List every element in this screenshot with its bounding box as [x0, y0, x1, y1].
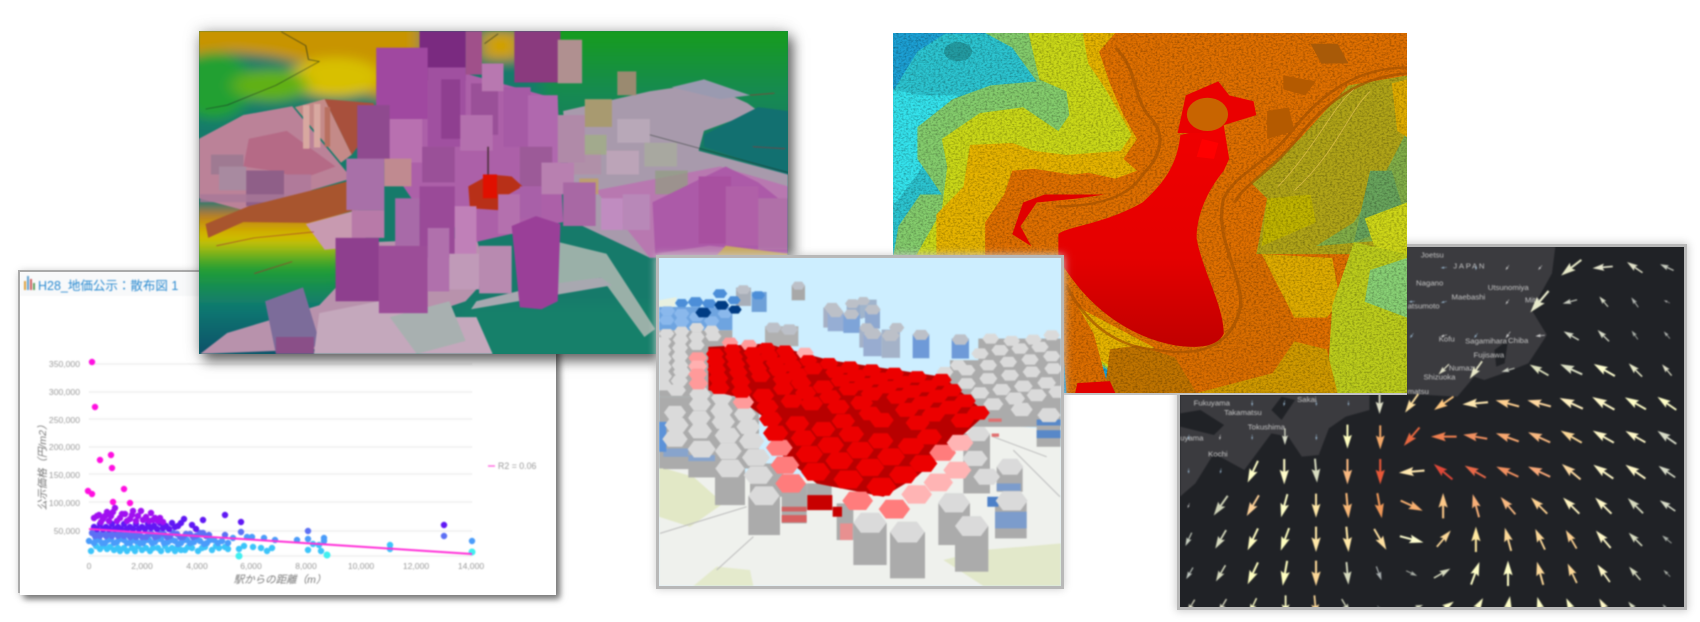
x axis title: 駅からの距離（m）: [234, 574, 326, 586]
place labels: Kofu: [1439, 334, 1455, 343]
panel: terrain hillshade elevation map: [893, 33, 1407, 393]
water clusters: [736, 282, 969, 359]
road lines on terrain: [206, 32, 788, 172]
place labels: uyama: [1180, 433, 1204, 442]
red high-elevation area: [1012, 81, 1256, 393]
coloured bands on stacks: [659, 419, 1061, 540]
x axis labels: 14,000: [458, 561, 484, 571]
scatter points: [88, 362, 472, 556]
place labels: Tokushima: [1248, 422, 1286, 431]
terrain colour layers: [162, 16, 839, 373]
panel: 3D city buildings on terrain: [199, 31, 788, 354]
dark red shadow under red hexagons: [708, 344, 987, 497]
place labels: Sakai: [1297, 395, 1317, 404]
place labels: Nagano: [1416, 278, 1443, 287]
left building mass: [199, 31, 788, 354]
small wind ticks over land: [1187, 265, 1543, 509]
x axis labels: [87, 561, 484, 571]
place labels: matsu: [1408, 387, 1429, 396]
place labels: Shizuoka: [1424, 373, 1456, 382]
y axis labels: 300,000: [49, 387, 80, 397]
y axis labels: 250,000: [49, 415, 80, 425]
central tower cluster: [379, 67, 563, 242]
place labels: atsumoto: [1408, 302, 1440, 311]
hillshade grain: [893, 33, 1407, 393]
y axis labels: 50,000: [54, 526, 80, 536]
place labels: JAPAN: [1453, 261, 1486, 270]
grey cylinder bodies: [659, 330, 1061, 578]
place labels: Mito: [1525, 295, 1540, 304]
red highlighted spot: [468, 174, 522, 210]
place labels: Fukuyama: [1194, 398, 1231, 407]
legend: R2 = 0.06: [498, 461, 536, 471]
light and pale red hexagons: [688, 338, 973, 518]
place labels: Utsunomiya: [1488, 283, 1529, 292]
x axis labels: 8,000: [295, 561, 317, 571]
x axis labels: 10,000: [348, 561, 374, 571]
y axis labels: [49, 359, 80, 536]
place labels: Joetsu: [1421, 250, 1444, 259]
grey hexagon tops: [655, 323, 1068, 542]
grid lines: [89, 364, 472, 556]
place labels: Numazu: [1449, 364, 1478, 373]
y axis labels: 100,000: [49, 498, 80, 508]
land masses: [1180, 247, 1555, 497]
y axis labels: 150,000: [49, 470, 80, 480]
panel: scatter chart of land price vs station distance: [20, 272, 556, 595]
x axis labels: 12,000: [403, 561, 429, 571]
trend line: [89, 529, 472, 554]
y axis labels: 200,000: [49, 442, 80, 452]
place labels: Sagamihara: [1465, 337, 1508, 346]
ground map: [659, 297, 1061, 586]
place labels: Kochi: [1208, 450, 1228, 459]
place labels: Maebashi: [1452, 292, 1486, 301]
y axis labels: 350,000: [49, 359, 80, 369]
place labels: Fujisawa: [1474, 350, 1505, 359]
x axis labels: 6,000: [240, 561, 262, 571]
chart title: H28_地価公示：散布図 1: [38, 278, 178, 293]
inland water: [1180, 340, 1508, 435]
elevation bands: left slopes: [893, 33, 1240, 394]
y axis title: 公示価格（円/m2）: [37, 419, 49, 511]
blue hexagons, top left: [659, 289, 765, 330]
right building mass: [563, 83, 788, 258]
place labels: Takamatsu: [1224, 408, 1262, 417]
icon: chart: [24, 276, 35, 290]
place labels: Chiba: [1508, 336, 1529, 345]
x axis labels: 2,000: [131, 561, 153, 571]
x axis labels: 0: [87, 561, 92, 571]
dark patch on upper slope: [944, 42, 972, 61]
panel: wind arrows map: [1180, 247, 1684, 607]
terrain brown band: [206, 182, 355, 238]
quarry terrace contours: [1056, 48, 1407, 352]
wind arrow field: [1183, 256, 1679, 619]
elevation bands: right slopes: [1056, 75, 1407, 393]
panel: 3D hexagon bin map: [659, 258, 1061, 586]
place labels: [1180, 250, 1540, 459]
x axis labels: 4,000: [186, 561, 208, 571]
red hexagon tops: [706, 343, 990, 496]
